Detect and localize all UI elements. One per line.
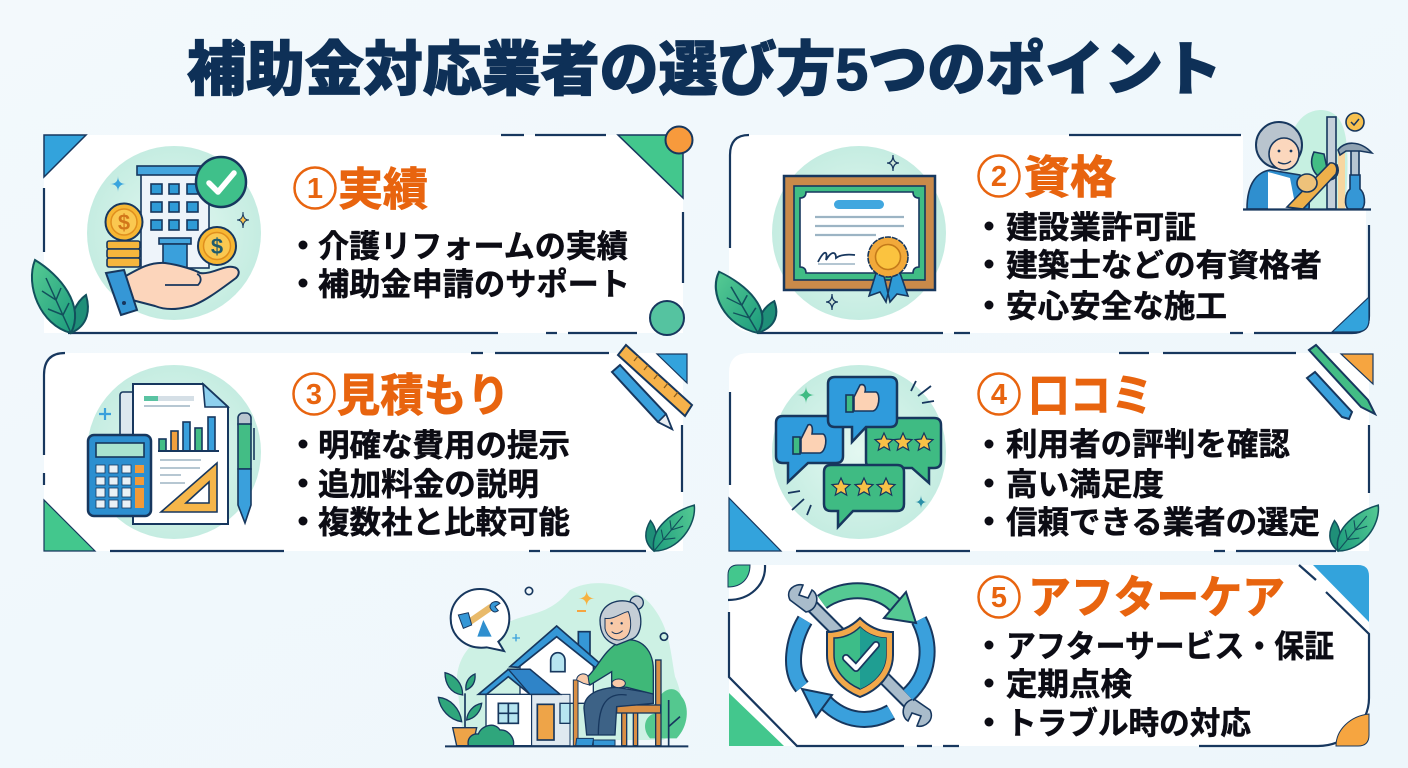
illustration: senior beside house (438, 583, 688, 746)
corner: orange bottom-right (1336, 714, 1369, 746)
panel: 口コミ (729, 345, 1380, 559)
panel: 見積もり (44, 345, 696, 559)
bullet list (984, 628, 1334, 741)
senior woman (573, 596, 653, 746)
bullet list: 複数社と比較可能 (318, 504, 570, 540)
bullet list (984, 209, 1322, 324)
icon: calculator and documents (87, 365, 261, 539)
bullet list (298, 228, 630, 302)
bullet list: 追加料金の説明 (318, 466, 539, 502)
icon: pen (612, 365, 672, 429)
icon: framed certificate (772, 146, 946, 320)
heading: 4 (991, 379, 1007, 411)
icon: senior with tools (1243, 110, 1372, 210)
heading (978, 152, 1116, 203)
bullet list: 補助金申請のサポート (318, 266, 630, 302)
icon: leaf (32, 260, 88, 333)
bullet list (984, 426, 1320, 540)
panel: 資格 (716, 110, 1372, 333)
title: 補助金対応業者の選び方5つのポイント (187, 37, 1222, 103)
corner: green triangle (618, 135, 683, 198)
corner: blue triangle (729, 498, 781, 551)
icon: leaf (1326, 495, 1380, 559)
bush (468, 725, 514, 746)
icon: building on hand with coins: $ (118, 210, 130, 235)
orange dot (666, 126, 692, 154)
corner: blue triangle (1332, 297, 1369, 332)
heading (294, 164, 428, 215)
bullet list (298, 427, 570, 540)
icon: building on hand with coins (87, 146, 261, 320)
heading: 資格 (1024, 152, 1116, 203)
icon: ruler (618, 345, 692, 416)
corner: blue triangle (44, 135, 86, 177)
heading: 見積もり (337, 370, 510, 421)
corner: orange triangle (1341, 354, 1373, 384)
icon: building on hand with coins: $ (211, 234, 223, 259)
bullet list: 建設業許可証 (1006, 209, 1196, 245)
corner: green bottom-left (729, 693, 784, 746)
heading: 口コミ (1028, 370, 1153, 421)
plant (438, 673, 482, 746)
heading: 1 (307, 173, 323, 205)
icon: shield with wrench and arrows (789, 585, 931, 726)
panel: 実績 (32, 126, 692, 335)
heading: 3 (306, 379, 322, 411)
bullet list: 高い満足度 (1006, 466, 1164, 502)
heading (978, 370, 1153, 421)
corner: blue triangle (657, 354, 687, 383)
icon: green pen (1309, 345, 1375, 414)
bullet list: 明確な費用の提示 (318, 427, 570, 463)
corner: green triangle (44, 500, 95, 551)
speech bubble with tools (451, 589, 509, 651)
bullet list: 建築士などの有資格者 (1006, 247, 1322, 283)
panel: アフターケア (728, 565, 1369, 746)
bullet list: アフターサービス・保証 (1006, 628, 1334, 664)
heading: 5 (991, 582, 1007, 614)
bullet list: トラブル時の対応 (1006, 705, 1251, 741)
icon: review bubbles (772, 365, 946, 539)
bullet list: 信頼できる業者の選定 (1006, 504, 1320, 540)
heading: アフターケア (1028, 572, 1285, 623)
icon: leaf (642, 495, 696, 559)
chair (617, 660, 661, 746)
teal dot (650, 301, 684, 335)
bullet list: 安心安全な施工 (1006, 288, 1227, 324)
icon: leaf (716, 272, 776, 333)
bullet list: 介護リフォームの実績 (318, 228, 628, 264)
corner: green top-left (728, 565, 750, 587)
bullet list: 定期点検 (1006, 666, 1132, 702)
tree (645, 689, 687, 746)
icon: blue pen (1307, 372, 1352, 419)
bullet list: 利用者の評判を確認 (1006, 426, 1290, 462)
corner: blue top-right (1313, 565, 1369, 622)
heading: 実績 (338, 164, 428, 215)
house (478, 626, 602, 746)
heading: 2 (991, 161, 1007, 193)
